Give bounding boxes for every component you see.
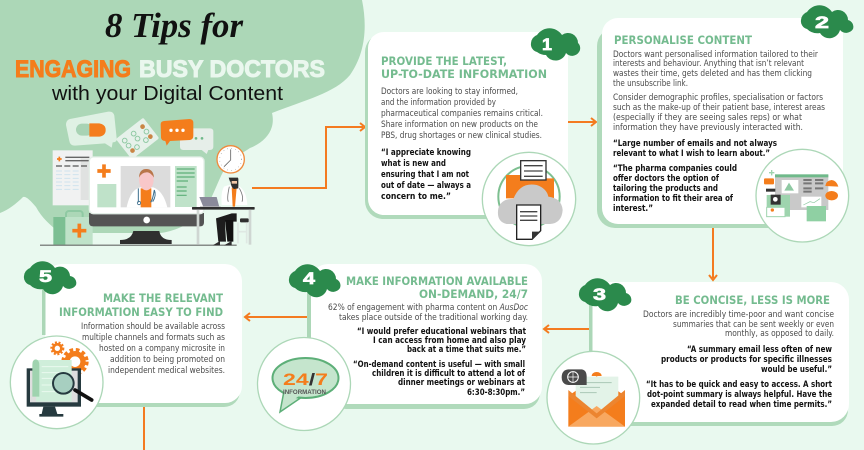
badge: number 5: 5 bbox=[39, 267, 52, 286]
quote: ensuring that I am not bbox=[381, 169, 469, 179]
body text: wastes their time, gets deleted and has them clicking bbox=[613, 68, 812, 78]
quote: “I appreciate knowing bbox=[381, 147, 471, 157]
badge: number 1: 1 bbox=[542, 35, 552, 54]
body text: Information should be available across bbox=[81, 321, 225, 331]
panel: tip 2 bbox=[597, 5, 853, 242]
quote bbox=[381, 147, 471, 201]
card bbox=[368, 32, 568, 215]
body text: Consider demographic profiles, specialisation or factors bbox=[613, 92, 823, 102]
badge: number 3 bbox=[579, 278, 631, 311]
body text: addition to being promoted on bbox=[110, 354, 225, 364]
icon: 24/7 speech bubble: 24 /7 bbox=[283, 370, 328, 389]
title line: engaging: ENGAGING bbox=[15, 56, 131, 83]
heading: BE CONCISE, LESS IS MORE bbox=[675, 293, 830, 307]
heading bbox=[59, 291, 223, 319]
badge: number 3: 3 bbox=[593, 285, 606, 304]
icon: envelope and globe bbox=[547, 351, 640, 444]
doctor on screen bbox=[127, 169, 167, 207]
title line: 8 Tips for: 8 Tips for bbox=[105, 6, 243, 45]
badge: number 2: 2 bbox=[815, 13, 829, 32]
body text: and the information provided by bbox=[381, 97, 496, 107]
body text: multiple channels and formats such as bbox=[82, 332, 225, 342]
icon: doctor at desk bbox=[192, 178, 255, 245]
quotes: tailoring the products and bbox=[613, 183, 718, 193]
icon: folder and documents bbox=[482, 152, 576, 246]
quotes bbox=[353, 326, 526, 397]
body text: PBS, drug shortages or new clinical studies. bbox=[381, 130, 542, 140]
icon: monitor bbox=[89, 157, 204, 244]
icon: medical document bbox=[53, 150, 93, 205]
arrow: tip 3 to tip 4 bbox=[544, 325, 590, 333]
quotes: information to fit their area of bbox=[613, 193, 733, 203]
arrow: tip 4 to tip 5 bbox=[245, 313, 307, 321]
quotes: interest.” bbox=[613, 203, 653, 213]
arrow: tip 1 to tip 2 bbox=[568, 118, 596, 126]
quotes bbox=[613, 138, 777, 213]
quote: out of date — always a bbox=[381, 180, 471, 190]
card shadow bbox=[330, 280, 540, 409]
body text bbox=[613, 49, 825, 132]
connector bar bbox=[307, 285, 311, 340]
body text: takes place outside of the traditional working day. bbox=[339, 312, 528, 322]
body text bbox=[643, 309, 834, 338]
heading: PROVIDE THE LATEST, bbox=[381, 54, 507, 68]
quotes: “The pharma companies could bbox=[613, 163, 737, 173]
badge: number 4: 4 bbox=[303, 269, 316, 288]
card bbox=[602, 18, 843, 224]
body text: Doctors are incredibly time-poor and want concise bbox=[643, 309, 834, 319]
heading: INFORMATION EASY TO FIND bbox=[59, 305, 223, 319]
quotes: relevant to what I wish to learn about.” bbox=[613, 148, 770, 158]
panel: tip 5 bbox=[10, 261, 242, 429]
body text: 62% of engagement with pharma content on AusDoc bbox=[328, 302, 528, 312]
quotes: 6:30-8:30pm.” bbox=[467, 387, 525, 397]
body text: Doctors are looking to stay informed, bbox=[381, 86, 518, 96]
connector bar bbox=[589, 300, 592, 360]
icon: search monitor and gears bbox=[10, 336, 103, 429]
heading bbox=[346, 274, 528, 301]
floor line bbox=[40, 245, 237, 246]
body text: Doctors want personalised information tailored to their bbox=[613, 49, 818, 59]
quote: concern to me.” bbox=[381, 191, 451, 201]
heading: MAKE THE RELEVANT bbox=[103, 291, 223, 305]
body text: such as the make-up of their patient base, interest areas bbox=[613, 102, 825, 112]
quotes bbox=[646, 344, 832, 409]
card shadow bbox=[605, 300, 848, 426]
body text: the unsubscribe link. bbox=[613, 78, 688, 88]
body text: interests and behaviour. Anything that isn’t relevant bbox=[613, 58, 805, 68]
quotes: “Large number of emails and not always bbox=[613, 138, 777, 148]
icon: 24/7 speech bubble: INFORMATION bbox=[283, 389, 326, 396]
panel: tip 3 bbox=[547, 278, 849, 444]
card bbox=[45, 264, 242, 403]
quotes: dot-point summary is always helpful. Have the bbox=[647, 389, 832, 399]
body text: hosted on a company microsite in bbox=[99, 343, 225, 353]
arrow: illustration to tip 1 bbox=[252, 123, 365, 188]
quotes: children it is difficult to attend a lot of bbox=[372, 368, 525, 378]
illustration: doctors and monitor bbox=[40, 112, 255, 246]
heading: UP-TO-DATE INFORMATION bbox=[381, 67, 547, 81]
quotes: “On-demand content is useful — with small bbox=[353, 359, 525, 369]
arrow: tip 5 continuing downward bbox=[143, 407, 145, 450]
body text bbox=[81, 321, 225, 375]
quotes: I can access from home and also play bbox=[373, 335, 526, 345]
body text: monthly, as opposed to daily. bbox=[725, 328, 834, 338]
body text bbox=[328, 302, 528, 322]
body text: independent medical websites. bbox=[108, 365, 225, 375]
badge: number 1 bbox=[531, 28, 580, 61]
panel: tip 4 bbox=[258, 264, 542, 430]
title bbox=[15, 6, 325, 105]
icon: orange speech bubble bbox=[161, 119, 193, 146]
quotes: would be useful.” bbox=[761, 364, 832, 374]
quotes: “A summary email less often of new bbox=[687, 344, 832, 354]
icon: personalised dashboard bbox=[756, 149, 849, 242]
panel: tip 1 bbox=[365, 28, 580, 246]
card shadow bbox=[70, 280, 240, 407]
card shadow bbox=[597, 28, 837, 228]
quotes: dinner meetings or webinars at bbox=[398, 377, 525, 387]
icon: pill speech bubble bbox=[66, 112, 117, 148]
badge: number 4 bbox=[289, 264, 340, 297]
heading: ON-DEMAND, 24/7 bbox=[419, 287, 528, 301]
icon: clock bbox=[217, 146, 244, 173]
icon: medical bag bbox=[53, 211, 93, 245]
heading: PERSONALISE CONTENT bbox=[614, 33, 752, 47]
quotes: expanded detail to read when time permits.” bbox=[651, 399, 832, 409]
heading: MAKE INFORMATION AVAILABLE bbox=[346, 274, 528, 288]
quotes: “I would prefer educational webinars that bbox=[357, 326, 526, 336]
icon: 24/7 speech bubble bbox=[258, 338, 350, 430]
quotes: “It has to be quick and easy to access. A short bbox=[646, 379, 832, 389]
title line: with your digital content: with your Digital Content bbox=[51, 83, 283, 105]
icon: grey speech bubble bbox=[180, 128, 213, 154]
heading bbox=[381, 54, 547, 81]
quotes: back at a time that suits me.” bbox=[407, 344, 526, 354]
icon: blister pack bbox=[116, 118, 159, 160]
body text: Share information on new products on the bbox=[381, 119, 538, 129]
arrow: tip 2 to tip 3 bbox=[709, 228, 717, 280]
quote: what is new and bbox=[381, 158, 446, 168]
title line: busy doctors: BUSY DOCTORS bbox=[139, 56, 325, 83]
badge: number 5 bbox=[24, 261, 76, 294]
body text: (especially if they are seeing sales reps) or what bbox=[613, 112, 803, 122]
body text: pharmaceutical companies remains critical. bbox=[381, 108, 543, 118]
card bbox=[311, 264, 542, 404]
card bbox=[592, 282, 849, 422]
body text bbox=[381, 86, 543, 140]
badge: number 2 bbox=[801, 5, 853, 38]
body text: information they have previously interacted with. bbox=[613, 122, 803, 132]
quotes: products or products for specific illnesses bbox=[661, 354, 832, 364]
card shadow bbox=[365, 34, 563, 219]
header cloud background bbox=[0, 0, 365, 233]
connector bar bbox=[42, 285, 46, 335]
body text: summaries that can be sent weekly or even bbox=[673, 319, 834, 329]
quotes: offer doctors the option of bbox=[613, 173, 719, 183]
